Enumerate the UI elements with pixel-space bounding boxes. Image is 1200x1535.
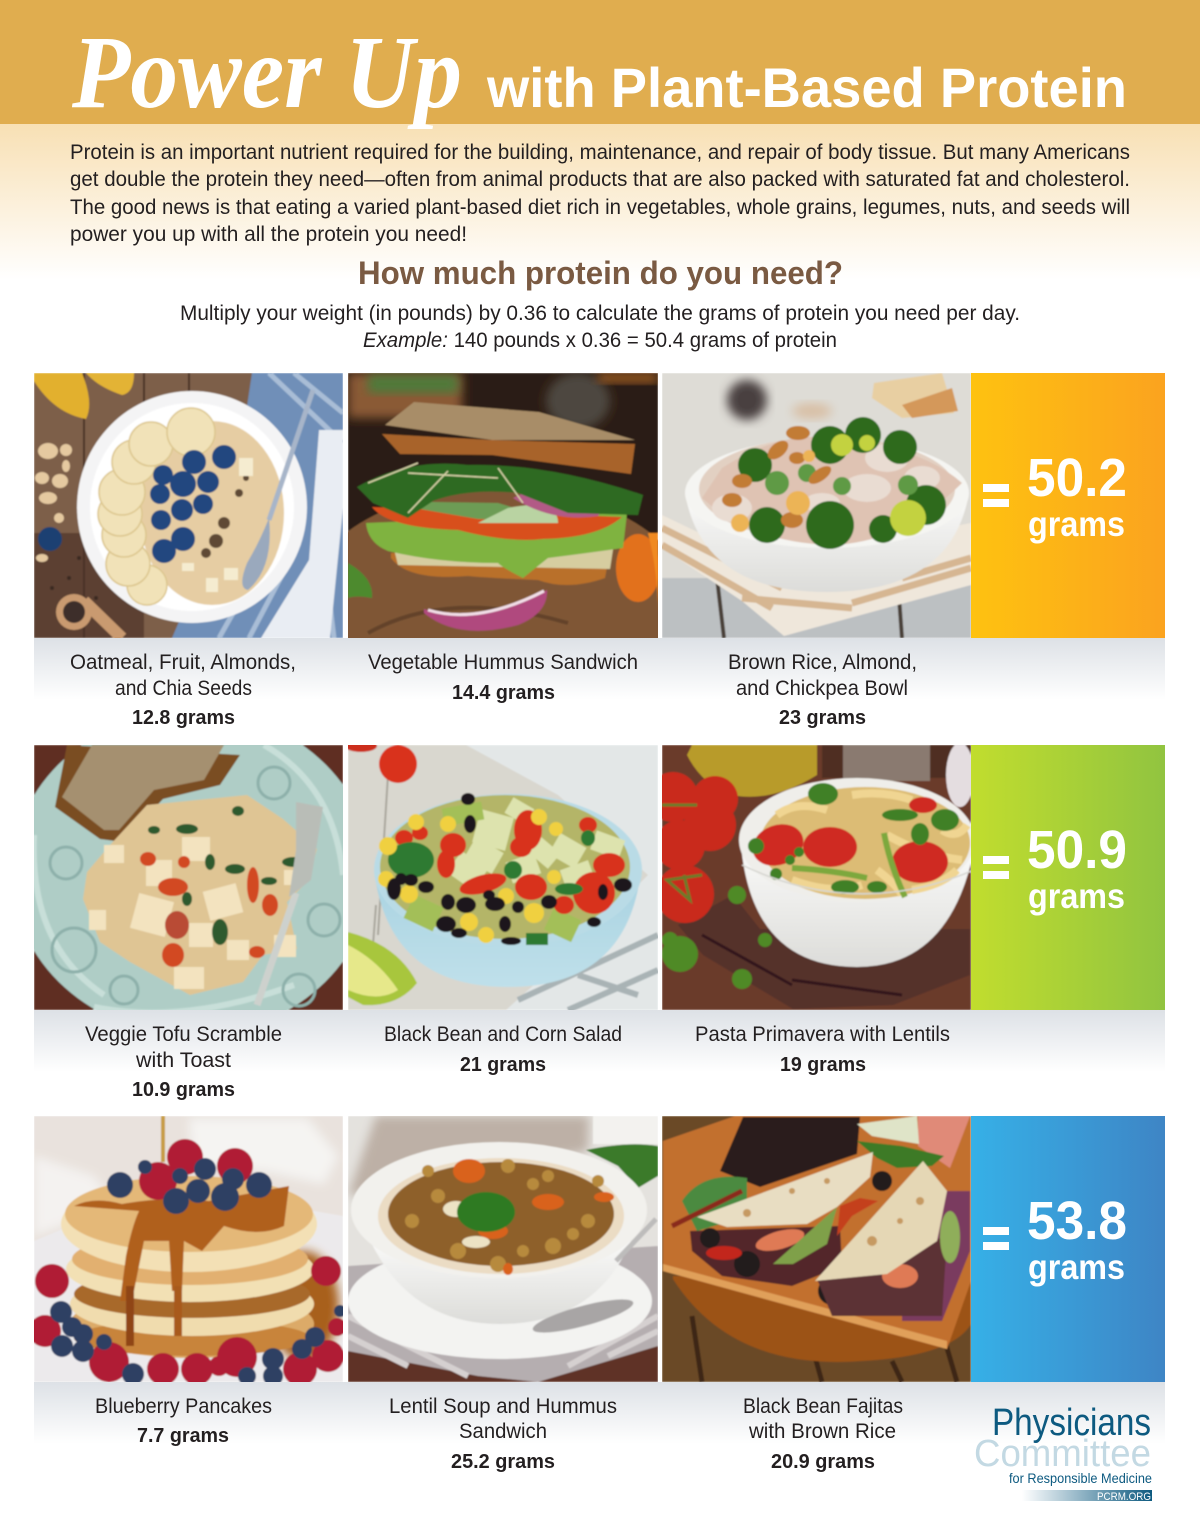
caption: tofu scramble: with Toast	[135, 1049, 231, 1072]
logo: Physicians Committee: for Responsible Medicine	[1009, 1470, 1152, 1486]
caption: pasta: 19 grams	[780, 1054, 866, 1076]
card: total 50.9 grams: 50.9	[1027, 820, 1127, 880]
card: total 50.9 grams	[971, 745, 1165, 1010]
card: total 53.8 grams	[971, 1116, 1165, 1382]
header banner	[0, 0, 1200, 124]
logo: Physicians Committee	[974, 1402, 1152, 1503]
caption: fajitas: 20.9 grams	[771, 1451, 875, 1473]
caption: rice bowl	[728, 651, 917, 729]
card: total 50.2 grams	[971, 373, 1165, 638]
caption band row 3	[34, 1382, 1165, 1444]
caption: tofu scramble: 10.9 grams	[132, 1079, 235, 1101]
photo: oatmeal	[34, 373, 343, 638]
card: total 50.2 grams: 50.2	[1027, 448, 1127, 508]
title	[71, 15, 1127, 130]
caption band row 2	[34, 1010, 1165, 1072]
caption: rice bowl: 23 grams	[779, 707, 866, 729]
caption: lentil soup: 25.2 grams	[451, 1451, 555, 1473]
card: total 50.9 grams: grams	[1028, 877, 1125, 916]
card: total 50.2 grams: grams	[1028, 505, 1125, 544]
card: total 53.8 grams: grams	[1028, 1248, 1125, 1287]
photo: black bean salad	[348, 745, 658, 1010]
caption: oatmeal: 12.8 grams	[132, 707, 235, 729]
caption: bean salad	[384, 1023, 622, 1076]
logo: Physicians Committee: Physicians	[992, 1402, 1151, 1444]
caption: lentil soup	[389, 1395, 617, 1473]
caption: sandwich	[368, 651, 638, 704]
intro text	[70, 141, 1130, 246]
caption: rice bowl: and Chickpea Bowl	[736, 677, 908, 700]
caption: oatmeal: Oatmeal, Fruit, Almonds,	[70, 651, 296, 674]
title: with Plant-Based Protein	[486, 56, 1127, 119]
title: Power Up	[71, 15, 462, 130]
caption: sandwich: Vegetable Hummus Sandwich	[368, 651, 638, 674]
photo: pancakes	[34, 1116, 343, 1382]
caption: pancakes: 7.7 grams	[137, 1425, 229, 1447]
photo: rice bowl	[662, 373, 971, 638]
caption: lentil soup: Sandwich	[459, 1420, 547, 1443]
photo: tofu scramble	[34, 745, 343, 1010]
logo: Physicians Committee: Committee	[974, 1433, 1151, 1475]
caption: pancakes	[95, 1395, 272, 1447]
caption: bean salad: 21 grams	[460, 1054, 546, 1076]
photo: fajitas	[662, 1116, 971, 1382]
intro background fade	[0, 124, 1200, 280]
photo: lentil soup	[348, 1116, 658, 1382]
photo: pasta primavera	[662, 745, 971, 1010]
caption: tofu scramble: Veggie Tofu Scramble	[85, 1023, 282, 1046]
caption: bean salad: Black Bean and Corn Salad	[384, 1023, 622, 1046]
caption: oatmeal: and Chia Seeds	[115, 677, 252, 700]
caption: pasta: Pasta Primavera with Lentils	[695, 1023, 950, 1046]
logo: Physicians Committee: PCRM.ORG	[1097, 1491, 1151, 1503]
caption band row 1	[34, 638, 1165, 700]
formula text: Multiply your weight (in pounds) by 0.36 to calculate the grams of protein you need per day.	[180, 302, 1020, 325]
caption: lentil soup: Lentil Soup and Hummus	[389, 1395, 617, 1418]
formula text: Example: 140 pounds x 0.36 = 50.4 grams of protein	[363, 329, 837, 352]
caption: fajitas: Black Bean Fajitas	[743, 1395, 903, 1418]
formula text	[180, 302, 1020, 352]
caption: fajitas: with Brown Rice	[748, 1420, 896, 1443]
caption: tofu scramble	[85, 1023, 282, 1101]
card: total 53.8 grams: 53.8	[1027, 1191, 1127, 1251]
intro text: get double the protein they need—often from animal products that are also packed with saturated fat and cholesterol.	[70, 168, 1130, 191]
caption: oatmeal	[70, 651, 296, 729]
photo: hummus sandwich	[348, 373, 658, 638]
caption: pancakes: Blueberry Pancakes	[95, 1395, 272, 1418]
heading: how much protein: How much protein do you need?	[358, 255, 843, 291]
caption: fajitas	[743, 1395, 903, 1473]
caption: rice bowl: Brown Rice, Almond,	[728, 651, 917, 674]
intro text: The good news is that eating a varied plant-based diet rich in vegetables, whole grains, legumes, nuts, and seeds will	[70, 196, 1130, 219]
caption: sandwich: 14.4 grams	[452, 682, 555, 704]
caption: pasta	[695, 1023, 950, 1076]
intro text: Protein is an important nutrient required for the building, maintenance, and repair of body tissue. But many Americans	[70, 141, 1130, 164]
intro text: power you up with all the protein you need!	[70, 223, 467, 246]
